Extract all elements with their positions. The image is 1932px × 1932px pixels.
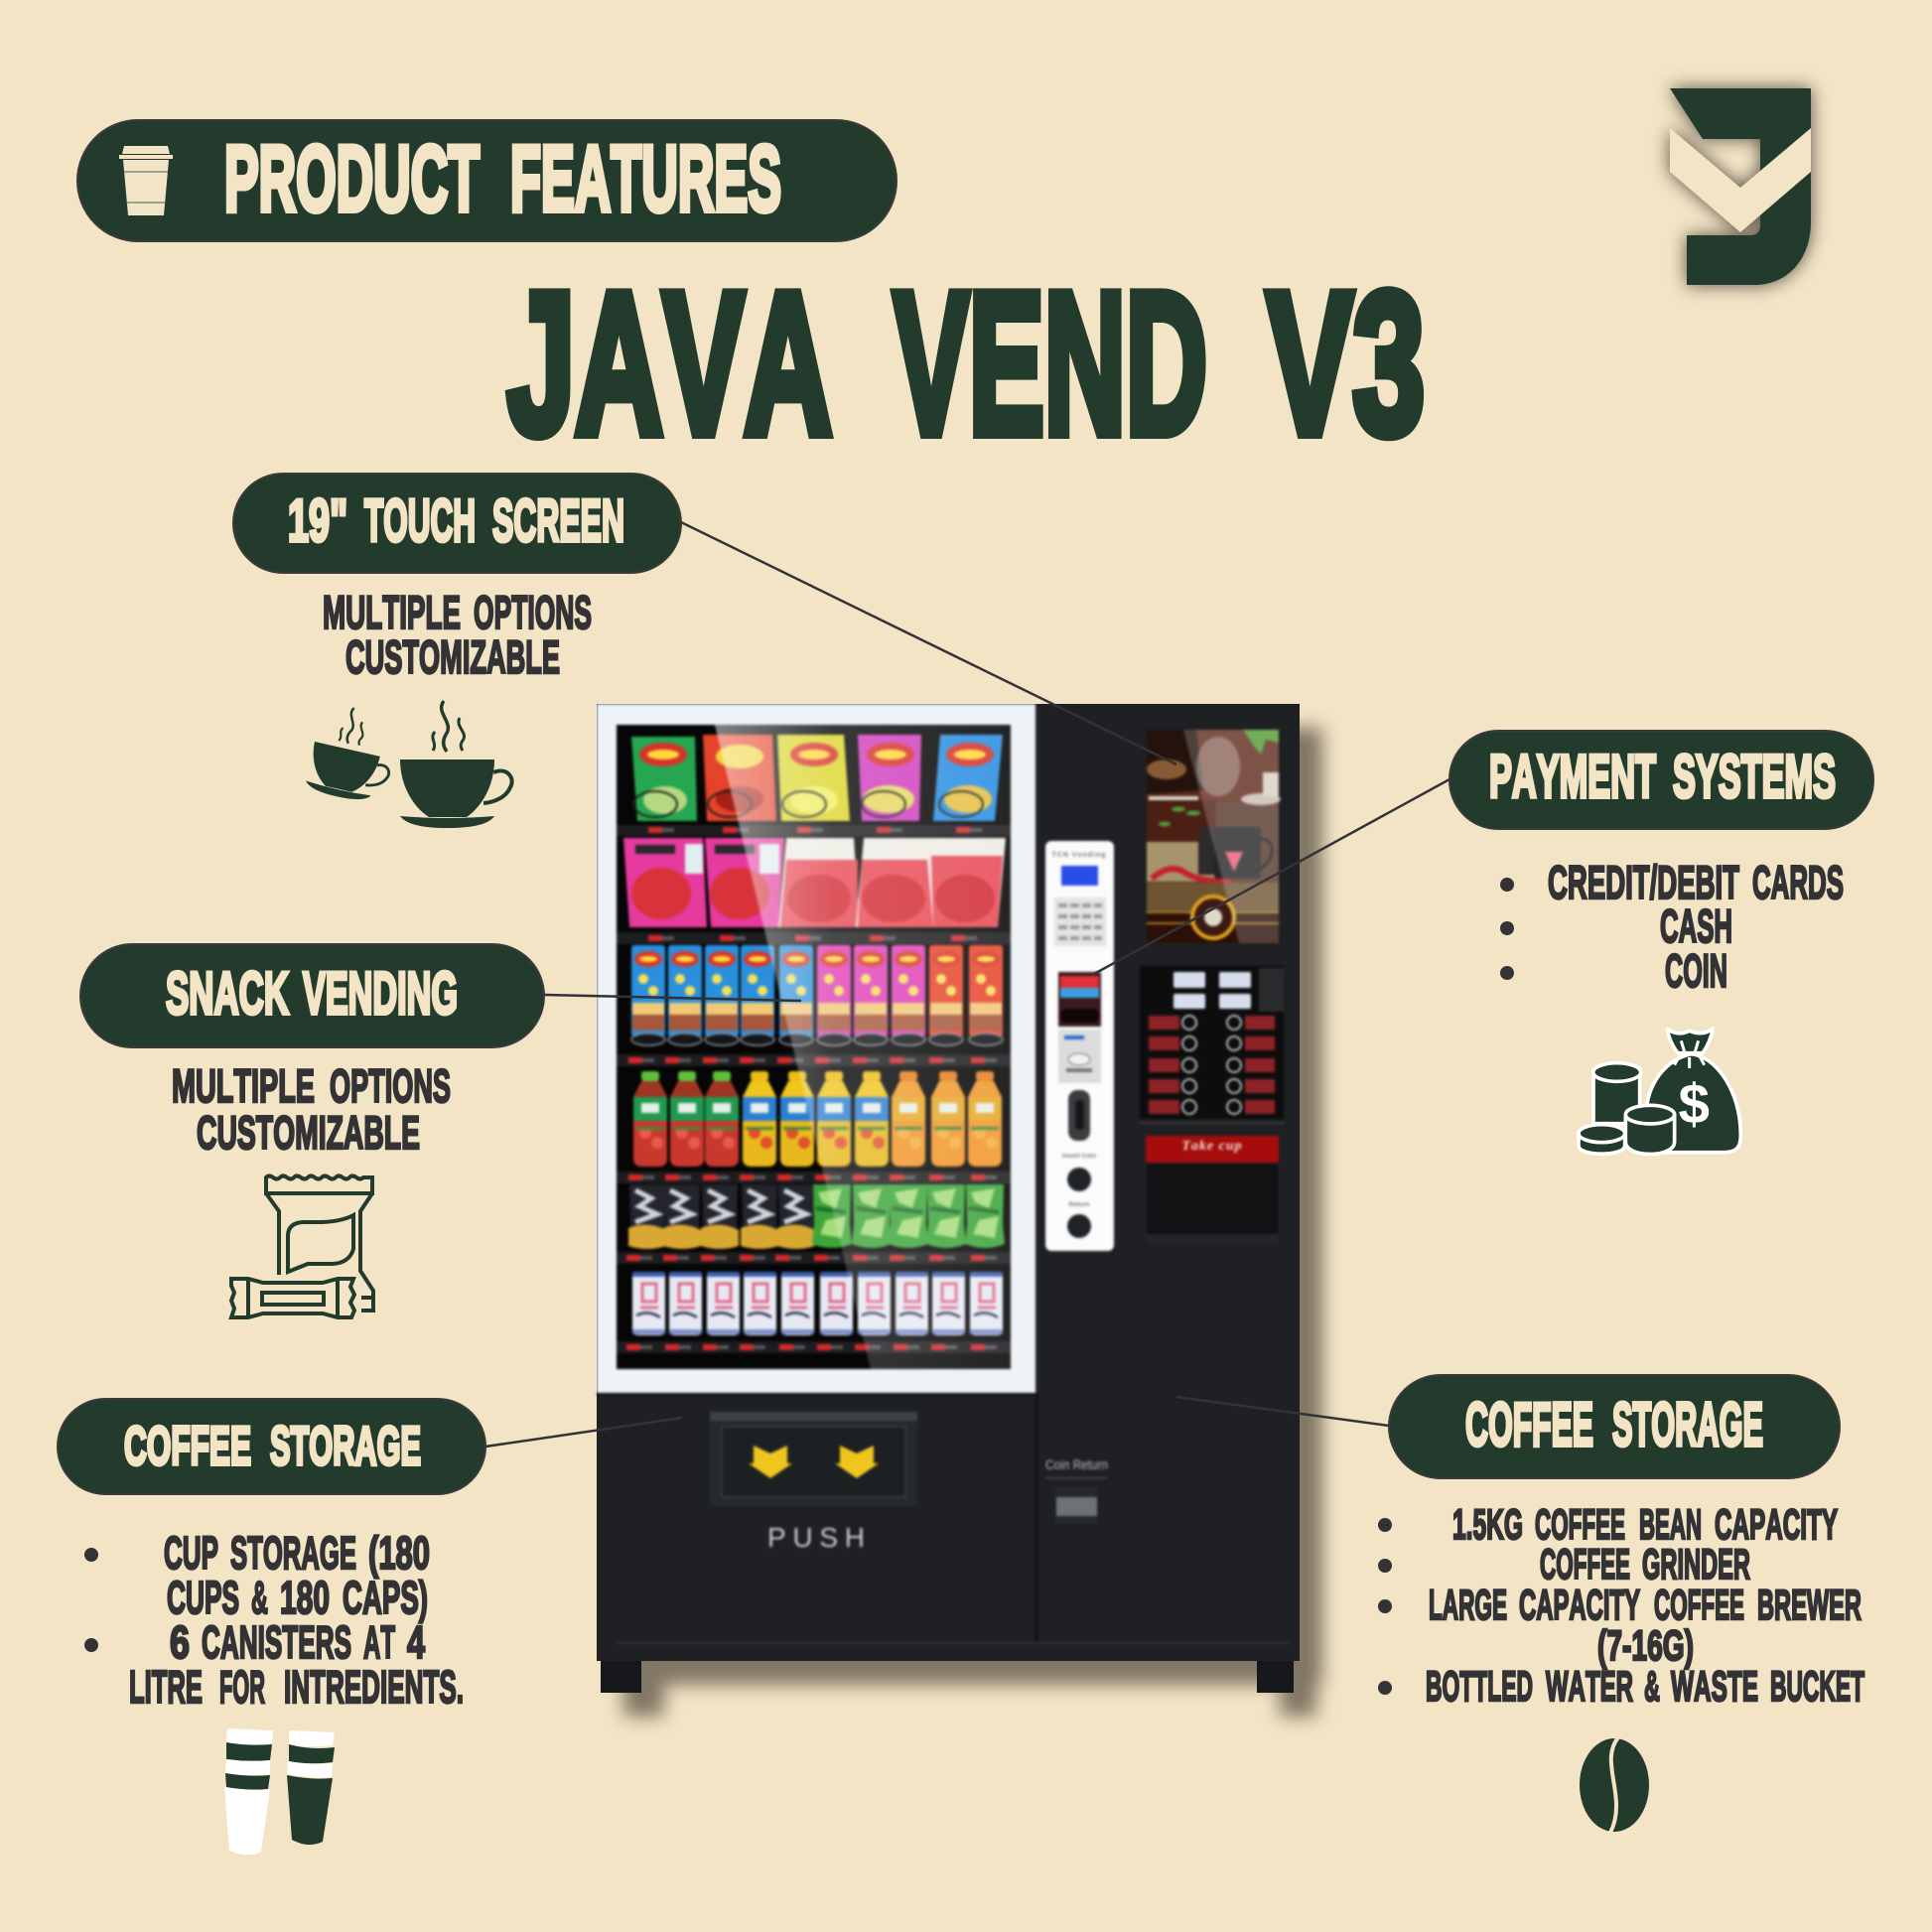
coffee features list: GRINDER — [1642, 1541, 1750, 1588]
cabinet dividers — [597, 1393, 1291, 1644]
callout line: coffee storage right — [1176, 1397, 1389, 1426]
bill acceptor — [1058, 972, 1101, 1027]
title: JAVA — [507, 251, 832, 477]
touch screen heading — [288, 487, 624, 554]
coffee features list: WASTE — [1671, 1663, 1758, 1711]
keypad — [1054, 897, 1106, 946]
callout line: coffee storage left — [485, 1418, 682, 1447]
coin slot — [1068, 1090, 1090, 1141]
touch screen pill — [233, 474, 681, 573]
insert coin label: Insert Coin — [1062, 1153, 1096, 1160]
touch screen description: MULTIPLE — [323, 586, 461, 638]
cup storage list: CANISTERS — [202, 1616, 351, 1668]
callout line: touch screen — [681, 522, 1176, 764]
row 4 bottles — [633, 1071, 1002, 1167]
cup storage list: (180 — [368, 1527, 430, 1579]
callout line: payment — [1094, 779, 1449, 974]
icon: paper cups — [224, 1728, 335, 1855]
product features badge — [77, 120, 897, 241]
touch screen heading: TOUCH — [364, 487, 476, 554]
snack vending description — [172, 1059, 451, 1159]
push label: PUSH — [767, 1522, 865, 1553]
take cup text: Take cup — [1181, 1139, 1243, 1154]
icon: money bag and coins — [1579, 1029, 1740, 1154]
icon: down arrow — [749, 1446, 792, 1478]
row 3 crisp cans — [631, 945, 1003, 1045]
take cup sign — [1146, 1136, 1279, 1163]
return button — [1067, 1214, 1091, 1238]
payment list: CASH — [1660, 899, 1732, 952]
coffee features list: (7-16G) — [1597, 1622, 1694, 1670]
touch screen heading: SCREEN — [492, 487, 624, 554]
touch screen heading: 19" — [288, 487, 347, 554]
drink selection panel — [1140, 966, 1285, 1124]
coffee storage pill — [58, 1399, 485, 1494]
payment list: CARDS — [1752, 856, 1844, 908]
touch screen description: CUSTOMIZABLE — [345, 630, 560, 683]
cup compartment — [1147, 1164, 1278, 1244]
cup storage list: 4 — [407, 1616, 425, 1668]
coin return label: Coin Return — [1045, 1456, 1108, 1472]
coffee features list: COFFEE — [1535, 1501, 1625, 1549]
coffee features list: & — [1644, 1663, 1660, 1711]
payment pill — [1449, 731, 1873, 829]
badge pill — [77, 120, 897, 241]
cup storage list: 6 — [170, 1616, 190, 1668]
cup storage list: CAPS) — [343, 1572, 428, 1623]
cup storage list: FOR — [219, 1661, 265, 1713]
icon: coffee cups — [304, 701, 512, 828]
payment list: COIN — [1665, 944, 1727, 997]
cup storage list: AT — [363, 1616, 395, 1668]
price tags — [626, 827, 997, 1350]
panel: coffee storage right — [1378, 1375, 1864, 1833]
row 6 drink cans — [632, 1272, 1003, 1335]
coffee features list: BOTTLED — [1426, 1663, 1533, 1711]
panel: payment systems — [1449, 731, 1873, 1154]
panel: touch screen — [233, 474, 681, 828]
coffee features list: CAPACITY — [1715, 1501, 1838, 1549]
card reader — [1058, 1030, 1101, 1083]
cup storage list: & — [251, 1572, 268, 1623]
title: VEND — [894, 251, 1207, 477]
machine body — [597, 704, 1300, 1693]
snack vending description: OPTIONS — [330, 1059, 451, 1112]
coffee features list: 1.5KG — [1452, 1501, 1523, 1549]
cup storage list: INTREDIENTS. — [284, 1661, 464, 1713]
coffee storage heading: COFFEE — [1465, 1391, 1593, 1459]
callout line: snack vending — [544, 995, 801, 1001]
machine details — [597, 704, 1291, 1644]
snack vending description: MULTIPLE — [172, 1059, 315, 1112]
panel brand label: TCN Vending — [1052, 852, 1106, 859]
badge heading: FEATURES — [510, 126, 781, 230]
shelves interior — [617, 725, 1011, 1369]
panel: snack vending — [80, 944, 544, 1317]
cup storage list — [84, 1527, 464, 1713]
glass reflection — [715, 725, 1011, 1369]
coffee features list: COFFEE — [1540, 1541, 1630, 1588]
snack vending pill — [80, 944, 544, 1047]
cup storage list: 180 — [280, 1572, 330, 1623]
panel: coffee storage right: STORAGE — [1612, 1391, 1763, 1459]
row 2 snack bags — [623, 838, 1006, 927]
insert coin button — [1067, 1168, 1091, 1191]
coffee features list: WATER — [1546, 1663, 1633, 1711]
vending machine — [597, 704, 1300, 1693]
coffee features list — [1378, 1501, 1864, 1711]
cup storage list: CUPS — [167, 1572, 239, 1623]
snack vending heading: SNACK — [166, 960, 289, 1027]
snack vending description: CUSTOMIZABLE — [197, 1106, 420, 1159]
title — [507, 251, 1425, 477]
title: V3 — [1267, 251, 1425, 477]
icon: snack packets — [231, 1175, 373, 1317]
row 1 snack bags — [631, 735, 1003, 821]
icon: down arrow — [835, 1446, 879, 1478]
icon: money bag and coins: $ — [1679, 1074, 1710, 1137]
white door frame — [597, 704, 1035, 1393]
icon: coffee bean — [1580, 1737, 1649, 1833]
cup storage list: LITRE — [129, 1661, 203, 1713]
badge heading: PRODUCT — [224, 126, 480, 230]
cup storage list: STORAGE — [230, 1527, 356, 1579]
return label: Return — [1069, 1201, 1089, 1208]
snack vending heading: VENDING — [303, 960, 458, 1027]
payment panel — [1045, 841, 1114, 1251]
touch screen description: OPTIONS — [474, 586, 592, 638]
cup storage list: CUP — [164, 1527, 218, 1579]
push flap — [710, 1412, 917, 1506]
payment heading: PAYMENT — [1489, 743, 1656, 810]
payment list — [1500, 856, 1844, 997]
payment list: CREDIT/DEBIT — [1548, 856, 1739, 908]
touch screen description — [323, 586, 592, 683]
coffee features list: COFFEE — [1654, 1582, 1744, 1629]
coffee features list: LARGE — [1429, 1582, 1507, 1629]
coffee storage heading: STORAGE — [270, 1415, 421, 1476]
icon: coffee cup — [119, 146, 173, 215]
coffee storage heading: COFFEE — [124, 1415, 251, 1476]
logo — [1670, 88, 1811, 285]
panel: coffee storage left — [58, 1399, 485, 1855]
coin return slot — [1045, 1477, 1107, 1524]
coffee features list: CAPACITY — [1519, 1582, 1640, 1629]
lcd display — [1061, 866, 1098, 886]
coffee features list: BEAN — [1639, 1501, 1702, 1549]
row 5 snack packs — [628, 1184, 1005, 1249]
coffee storage pill — [1389, 1375, 1840, 1478]
touch screen — [1147, 730, 1281, 943]
